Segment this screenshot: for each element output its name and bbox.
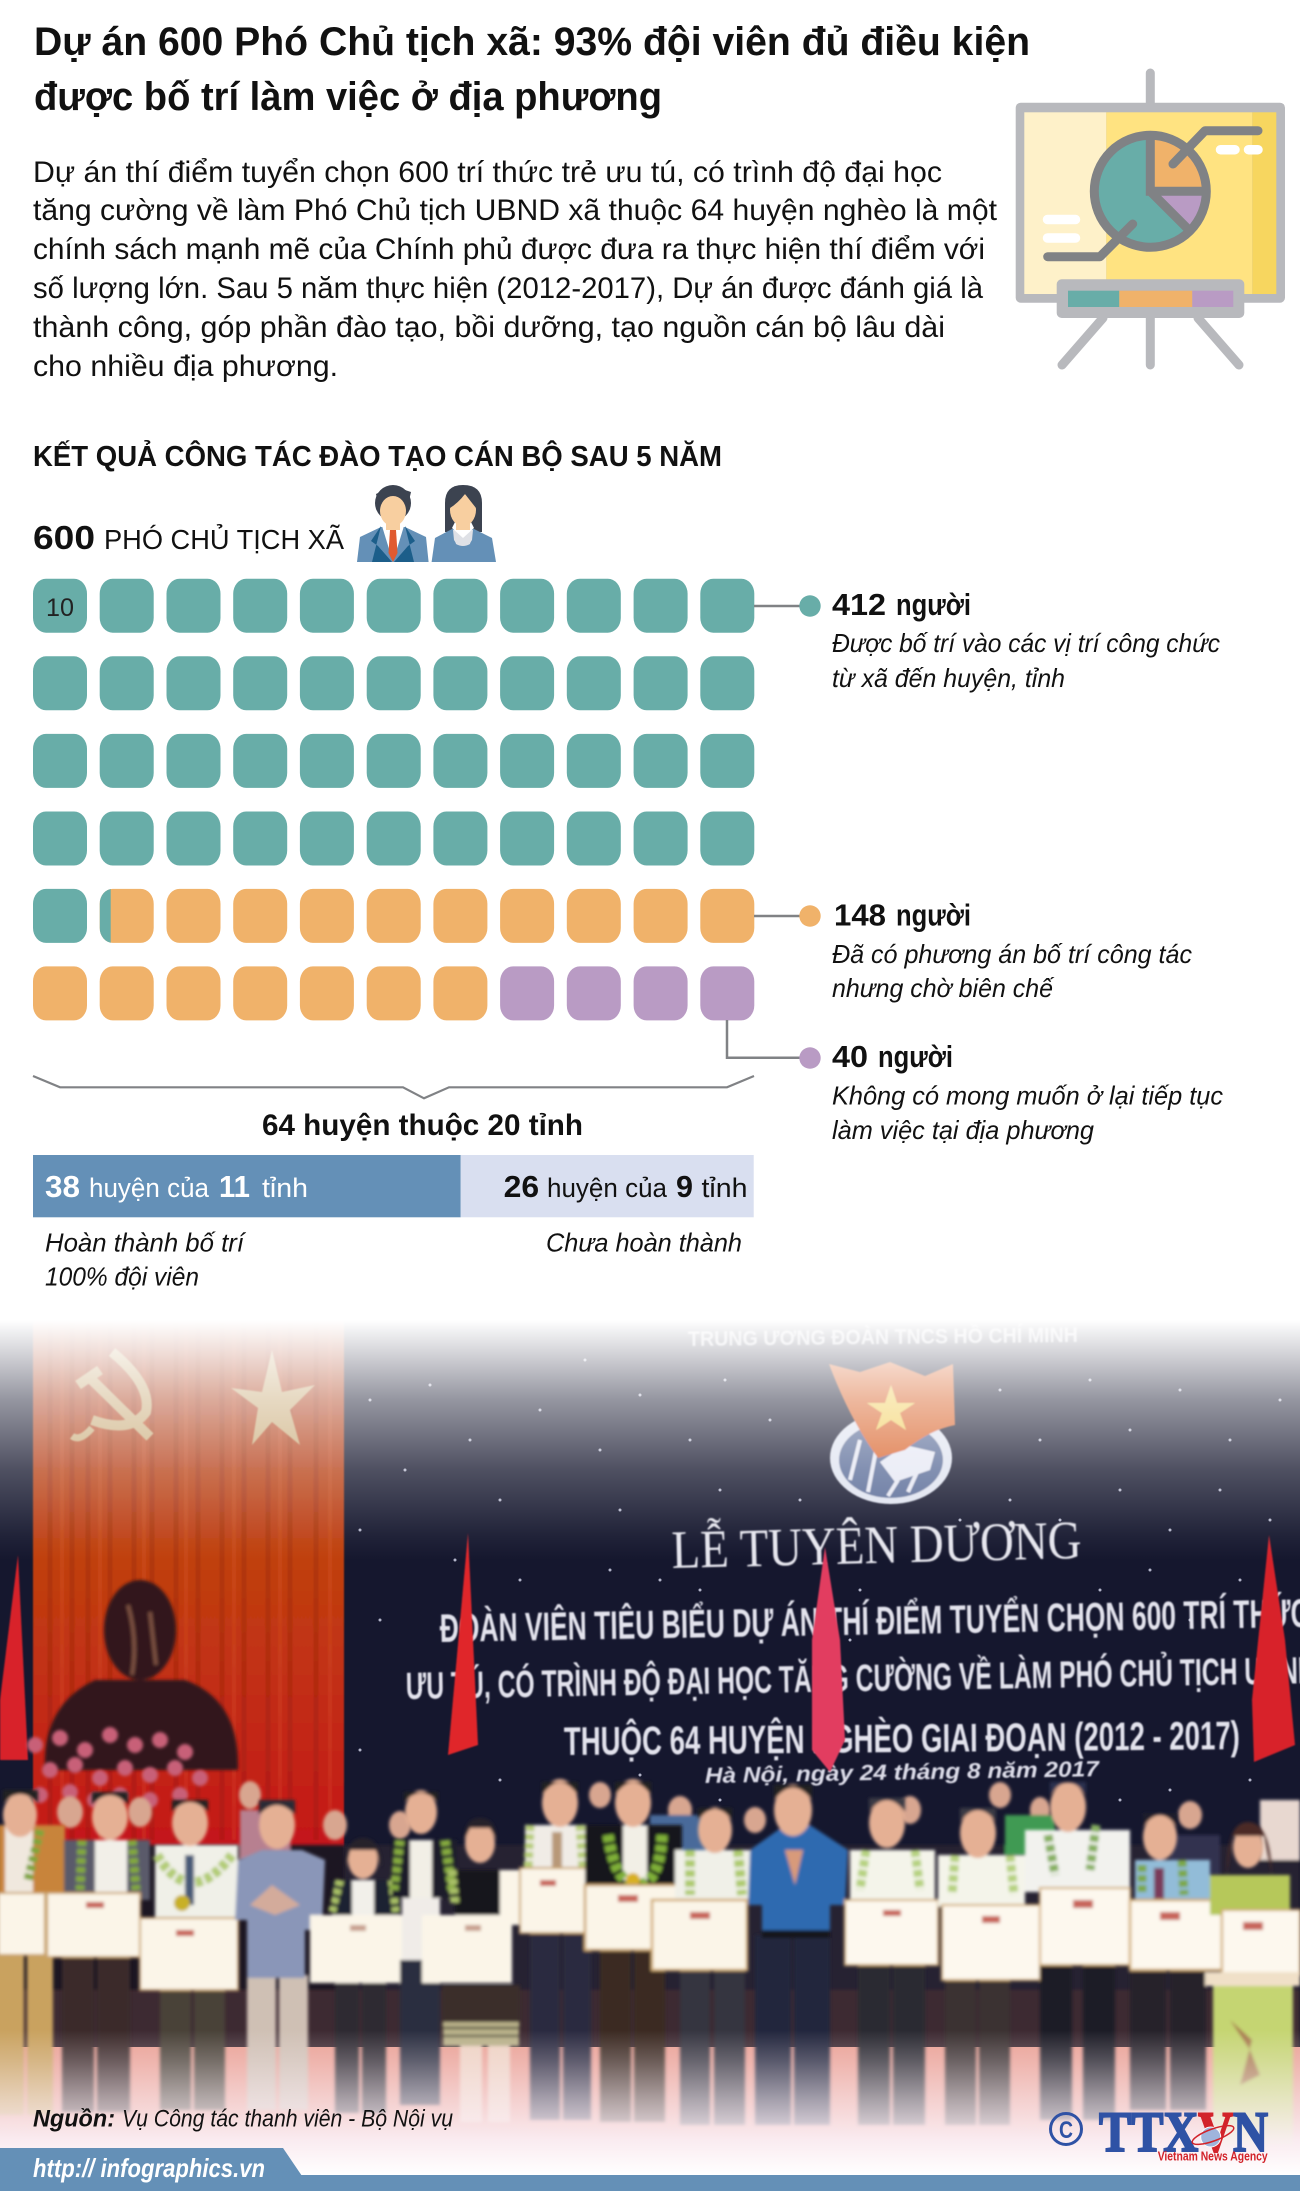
- back row audience: [0, 1781, 1300, 2050]
- P4: [235, 1800, 325, 2110]
- logo: TTXVN: Vietnam News Agency: [1158, 2149, 1268, 2164]
- icon: presentation easel with pie chart: [1016, 73, 1285, 365]
- note: completed: [45, 1228, 247, 1292]
- row 6: orange into purple: [33, 966, 754, 1020]
- top white fade: [0, 1320, 1300, 1560]
- split bar: unfinished districts: 26: [504, 1169, 539, 1204]
- footer bar with url: http:// infographics.vn: [33, 2153, 265, 2183]
- photo: award ceremony: [0, 1320, 1300, 2191]
- source note: Vụ Công tác thanh viên - Bộ Nội vụ: [122, 2106, 453, 2133]
- intro text block: tăng cường về làm Phó Chủ tịch UBND xã thuộc 64 huyện nghèo là một: [33, 194, 998, 227]
- P2: [47, 1792, 150, 2112]
- P5: [310, 1838, 402, 2113]
- callout: 148 người: [754, 898, 1192, 1003]
- callout: 412 người: Được bố trí vào các vị trí công chức: [832, 628, 1220, 658]
- screen text lines: Hà Nội, ngày 24 tháng 8 năm 2017: [705, 1756, 1101, 1788]
- title: [34, 20, 1030, 119]
- P8: [520, 1779, 591, 2120]
- P14: [1025, 1782, 1130, 2120]
- heading: 64 huyện thuộc 20 tỉnh: 64 huyện thuộc 20 tỉnh: [262, 1109, 583, 1142]
- split bar: unfinished districts: huyện của: [547, 1173, 668, 1203]
- teal row 4: [33, 812, 754, 866]
- teal row 3: [33, 734, 754, 788]
- waffle chart: 600 people, each square 10: [33, 579, 754, 1020]
- P3: [140, 1800, 238, 2110]
- callout: 40 người: làm việc tại địa phương: [832, 1115, 1095, 1145]
- callout: 148 người: người: [896, 898, 971, 932]
- teal row 2: [33, 656, 754, 710]
- split bar: unfinished districts: [461, 1155, 754, 1217]
- callout: 40 người: [727, 1020, 1223, 1145]
- P9: [585, 1779, 682, 2122]
- section heading: KẾT QUẢ CÔNG TÁC ĐÀO TẠO CÁN BỘ SAU 5 NĂM: [33, 439, 722, 473]
- P12: [845, 1798, 938, 2125]
- split bar: completed districts: 11: [219, 1169, 250, 1204]
- subheading: 600 phó chủ tịch xã: PHÓ CHỦ TỊCH XÃ: [104, 523, 344, 555]
- icon: man and woman officials: [357, 485, 496, 562]
- footer bar with url: [0, 2148, 1300, 2191]
- callout: 412 người: từ xã đến huyện, tỉnh: [832, 663, 1065, 693]
- flower arrangement: [35, 1735, 200, 1800]
- split bar: unfinished districts: 9: [676, 1169, 693, 1204]
- intro text block: thành công, góp phần đào tạo, bồi dưỡng, tạo nguồn cán bộ lâu dài: [33, 311, 945, 344]
- brace: [33, 1076, 754, 1098]
- source note: Nguồn:: [33, 2106, 115, 2133]
- P7: [422, 1818, 530, 2122]
- subheading: 600 phó chủ tịch xã: 600: [33, 519, 95, 556]
- callout: 412 người: người: [896, 587, 971, 622]
- callout: 40 người: người: [878, 1039, 953, 1074]
- P16: [1205, 1822, 1300, 2145]
- callout: 148 người: nhưng chờ biên chế: [832, 973, 1054, 1003]
- P13: [938, 1808, 1040, 2125]
- callout: 40 người: 40: [832, 1039, 868, 1074]
- hammer and sickle: [72, 1352, 150, 1438]
- split bar: completed districts: huyện của: [89, 1173, 210, 1203]
- P1: [0, 1790, 65, 2115]
- callout: 412 người: [754, 587, 1220, 693]
- callout: 40 người: Không có mong muốn ở lại tiếp tục: [832, 1080, 1223, 1110]
- note: completed: 100% đội viên: [45, 1262, 199, 1292]
- intro text block: [33, 156, 998, 383]
- note: not completed: Chưa hoàn thành: [546, 1228, 742, 1258]
- note: completed: Hoàn thành bố trí: [45, 1228, 247, 1258]
- callout: 148 người: Đã có phương án bố trí công tác: [832, 939, 1192, 969]
- row 5: teal into orange: [33, 889, 754, 943]
- intro text block: Dự án thí điểm tuyển chọn 600 trí thức trẻ ưu tú, có trình độ đại học: [33, 156, 942, 189]
- youth union emblem: [829, 1362, 955, 1504]
- P10: [652, 1807, 750, 2125]
- red flags: [0, 1533, 1295, 1772]
- split bar: completed districts: [33, 1155, 461, 1217]
- logo: TTXVN: TTXVN: [1099, 2101, 1268, 2164]
- award recipients front row: [0, 1779, 1300, 2145]
- title: được bố trí làm việc ở địa phương: [34, 75, 662, 119]
- screen text lines: [405, 1589, 1300, 1788]
- teal row 1 with value label: [33, 579, 754, 633]
- title: Dự án 600 Phó Chủ tịch xã: 93% đội viên đủ điều kiện: [34, 20, 1030, 64]
- P6: [392, 1790, 457, 2105]
- screen title: lễ tuyên dương: LỄ TUYÊN DƯƠNG: [671, 1508, 1082, 1580]
- P15: [1130, 1813, 1222, 2110]
- screen sparkles: [360, 1360, 1280, 1800]
- star: [231, 1350, 315, 1445]
- bronze bust: [45, 1580, 238, 1770]
- split bar: completed districts: 38: [45, 1169, 80, 1204]
- callout: 148 người: 148: [834, 898, 886, 932]
- logo: TTXVN: C: [1059, 2117, 1073, 2144]
- split bar: unfinished districts: tỉnh: [702, 1173, 748, 1203]
- screen header text: TRUNG ƯƠNG ĐOÀN TNCS HỒ CHÍ MINH: [688, 1323, 1078, 1351]
- intro text block: chính sách mạnh mẽ của Chính phủ được đưa ra thực hiện thí điểm với: [33, 233, 985, 266]
- intro text block: số lượng lớn. Sau 5 năm thực hiện (2012-2017), Dự án được đánh giá là: [33, 272, 983, 305]
- stage curtain: [33, 1320, 344, 1850]
- intro text block: cho nhiều địa phương.: [33, 350, 338, 383]
- subheading: 600 phó chủ tịch xã: [33, 519, 344, 556]
- P11: [748, 1784, 848, 2125]
- callout: 412 người: 412: [832, 587, 886, 622]
- teal row 1 with value label: 10: [46, 594, 74, 622]
- split bar: completed districts: tỉnh: [262, 1173, 308, 1203]
- stage floor: [0, 2047, 1300, 2191]
- bottom white fade: [0, 2030, 1300, 2175]
